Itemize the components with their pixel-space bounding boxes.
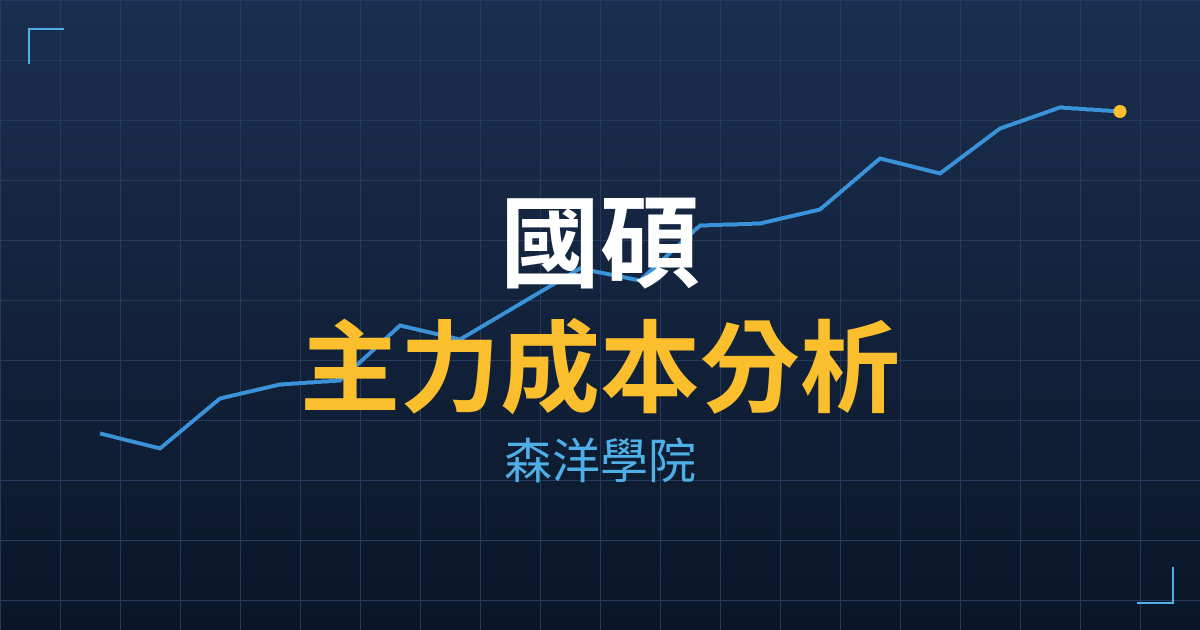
title: company name: 國碩 bbox=[500, 189, 700, 301]
end point marker bbox=[1114, 105, 1126, 118]
heading: main cost analysis: 主力成本分析 bbox=[300, 314, 900, 426]
line chart: price trend bbox=[100, 105, 1126, 448]
subtitle: academy name: 森洋學院 bbox=[504, 436, 696, 489]
corner bracket: top left bbox=[29, 29, 64, 64]
corner bracket: bottom right bbox=[1137, 567, 1173, 603]
